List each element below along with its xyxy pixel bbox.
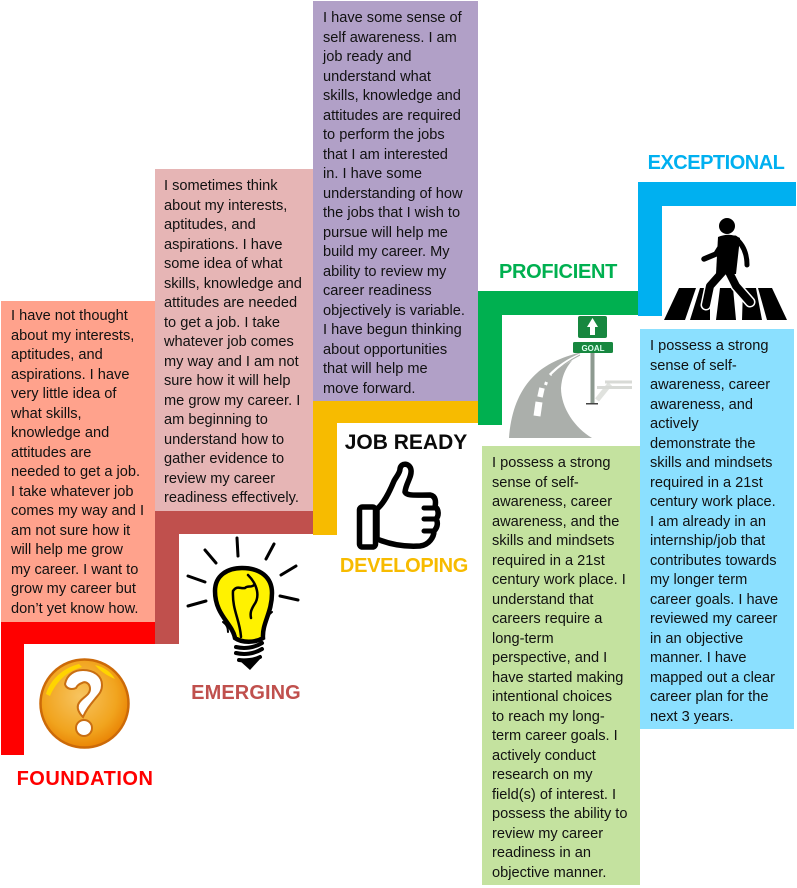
panel: developing description: understanding of how [323, 186, 463, 202]
panel: proficient description: I possess a strong [492, 455, 610, 471]
panel: exceptional description: required in a 21st [650, 474, 763, 490]
panel: foundation description: aptitudes, and [11, 347, 103, 363]
panel: emerging description: aptitudes, and [164, 217, 256, 233]
icon: road to goal sign [509, 316, 632, 438]
panel: developing description: build my career. My [323, 244, 450, 260]
panel: exceptional description: internship/job that [650, 533, 765, 549]
heading: exceptional: EXCEPTIONAL [648, 152, 784, 174]
panel: developing description: I have some sense of [323, 10, 462, 26]
panel: exceptional description: next 3 years. [650, 708, 734, 724]
panel: exceptional description [640, 329, 794, 729]
panel: foundation description: attitudes are [11, 444, 91, 460]
panel: exceptional description: my longer term [650, 572, 747, 588]
panel: emerging description: I sometimes think [164, 178, 278, 194]
panel: developing description: skills, knowledge and [323, 88, 461, 104]
panel: emerging description [155, 169, 314, 511]
icon: question mark [39, 658, 130, 749]
panel: proficient description: readiness in an [492, 845, 591, 861]
panel: proficient description: term career goals. I [492, 728, 618, 744]
panel: foundation description: knowledge and [11, 425, 109, 441]
panel: emerging description: sure how it will help [164, 373, 291, 389]
panel: exceptional description: career goals. I have [650, 592, 778, 608]
panel: developing description: to perform the jobs [323, 127, 445, 143]
panel: foundation description: needed to get a job. [11, 464, 140, 480]
panel: exceptional description: awareness, career [650, 377, 770, 393]
panel: proficient description: field(s) of interest. I [492, 786, 616, 802]
panel: proficient description: review my career [492, 826, 603, 842]
panel: developing description: self awareness. I am [323, 30, 457, 46]
panel: emerging description: whatever job comes [164, 334, 294, 350]
panel: developing description: about opportunities [323, 342, 447, 358]
panel: emerging description: attitudes are needed [164, 295, 297, 311]
panel: proficient description: understand that [492, 592, 593, 608]
panel: proficient description: awareness, career [492, 494, 612, 510]
panel: exceptional description: reviewed my career [650, 611, 777, 627]
panel: exceptional description: in an objective [650, 630, 743, 646]
heading: developing: DEVELOPING [340, 555, 468, 577]
panel: foundation description: comes my way and I [11, 503, 144, 519]
panel: proficient description: sense of self- [492, 474, 579, 490]
panel: emerging description: readiness effectively. [164, 490, 299, 506]
panel: foundation description: what skills, [11, 406, 82, 422]
panel: foundation description: very little idea of [11, 386, 116, 402]
icon: thumbs up [356, 462, 441, 550]
panel: proficient description: possess the ability to [492, 806, 627, 822]
panel: exceptional description: I possess a strong [650, 338, 768, 354]
panel: developing description: pursue will help me [323, 224, 448, 240]
heading: foundation: FOUNDATION [17, 768, 153, 790]
panel: foundation description: I take whatever job [11, 484, 134, 500]
panel: proficient description: perspective, and I [492, 650, 607, 666]
icon: road to goal sign: GOAL [581, 344, 605, 353]
panel: proficient description: careers require a [492, 611, 602, 627]
panel: foundation description: my career. I want to [11, 562, 138, 578]
panel: exceptional description: career plan for the [650, 689, 768, 705]
panel: proficient description: to reach my long- [492, 708, 605, 724]
panel: developing description: in. I have some [323, 166, 422, 182]
panel: emerging description: am beginning to [164, 412, 268, 428]
panel: emerging description: understand how to [164, 432, 284, 448]
panel: developing description: I have begun thinking [323, 322, 462, 338]
panel: foundation description: am not sure how it [11, 522, 130, 538]
heading: job ready: JOB READY [345, 431, 467, 454]
panel: proficient description: actively conduct [492, 748, 596, 764]
panel: emerging description: aspirations. I have [164, 236, 282, 252]
panel: emerging description: review my career [164, 470, 275, 486]
panel: developing description: that will help me [323, 361, 428, 377]
panel: foundation description: don’t yet know how. [11, 600, 138, 616]
panel: emerging description: to get a job. I take [164, 314, 280, 330]
panel: proficient description: have started making [492, 670, 623, 686]
panel: developing description: career readiness [323, 283, 432, 299]
panel: proficient description: research on my [492, 767, 593, 783]
panel: developing description: ability to review my [323, 264, 446, 280]
panel: emerging description: gather evidence to [164, 451, 284, 467]
panel: developing description: move forward. [323, 380, 415, 396]
panel: exceptional description: demonstrate the [650, 436, 755, 452]
panel: exceptional description: manner. I have [650, 650, 747, 666]
heading: emerging: EMERGING [191, 682, 301, 704]
panel: foundation description: I have not thought [11, 308, 128, 324]
panel: developing description [313, 1, 478, 401]
panel: exceptional description: mapped out a clear [650, 670, 775, 686]
panel: proficient description: awareness, and the [492, 514, 619, 530]
panel: proficient description: intentional choices [492, 689, 612, 705]
panel: foundation description: will help me grow [11, 542, 123, 558]
panel: emerging description: some idea of what [164, 256, 282, 272]
panel: exceptional description: contributes towards [650, 552, 777, 568]
panel: emerging description: me grow my career. I [164, 392, 300, 408]
panel: proficient description: long-term [492, 630, 554, 646]
panel: exceptional description: century work place. [650, 494, 776, 510]
panel: foundation description: grow my career but [11, 581, 136, 597]
panel: developing description: attitudes are required [323, 108, 461, 124]
panel: developing description: that I am interested [323, 146, 448, 162]
panel: proficient description: century work place. I [492, 572, 626, 588]
panel: proficient description: objective manner. [492, 864, 606, 880]
panel: exceptional description: actively [650, 416, 699, 432]
panel: developing description: objectively is variable. [323, 302, 465, 318]
panel: proficient description: required in a 21st [492, 552, 605, 568]
panel: exceptional description: sense of self- [650, 358, 737, 374]
panel: exceptional description: skills and mindsets [650, 455, 772, 471]
panel: emerging description: about my interests, [164, 198, 287, 214]
panel: exceptional description: I am already in an [650, 514, 766, 530]
panel: exceptional description: awareness, and [650, 396, 753, 412]
panel: developing description: job ready and [323, 49, 411, 65]
panel: emerging description: skills, knowledge and [164, 276, 302, 292]
panel: foundation description [1, 301, 156, 622]
panel: developing description: understand what [323, 68, 431, 84]
panel: foundation description: about my interests, [11, 328, 134, 344]
panel: foundation description: aspirations. I have [11, 366, 129, 382]
panel: developing description: the jobs that I wish to [323, 205, 460, 221]
heading: proficient: PROFICIENT [499, 261, 617, 283]
panel: proficient description: skills and mindsets [492, 533, 614, 549]
icon: light bulb [186, 536, 300, 670]
panel: emerging description: my way and I am not [164, 354, 299, 370]
panel: proficient description [482, 446, 640, 885]
icon: pedestrian crossing [664, 218, 787, 320]
